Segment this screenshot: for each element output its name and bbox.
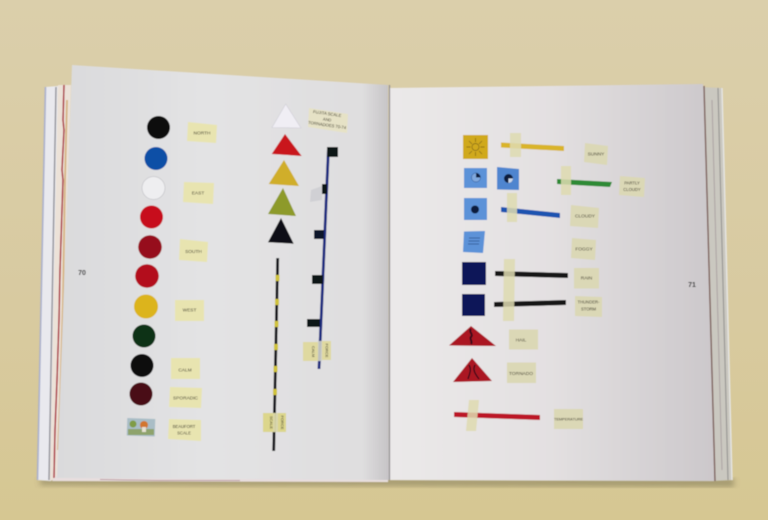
bar: cloudy (501, 193, 560, 222)
label: foggy (571, 238, 596, 260)
triangle: yellow (269, 160, 299, 186)
circle: crimson (135, 264, 159, 288)
left page sheet (57, 65, 389, 480)
right page stack (700, 86, 732, 481)
weather symbol: cloudy (464, 198, 487, 220)
triangle: black (268, 218, 294, 244)
bar: partly cloudy (557, 166, 612, 195)
label: calm: CALM (178, 368, 192, 374)
yellow ticks (273, 275, 280, 395)
label: tornado: TORNADO (509, 371, 533, 377)
label: Beaufort scale: BEAUFORT (173, 424, 196, 429)
circle: east (142, 176, 165, 200)
page number 71: 71 (688, 282, 696, 289)
bar: sunny (501, 133, 564, 157)
label: Fujita scale and tornadoes: TORNADOES 70-74 (308, 120, 347, 130)
tape labels (263, 413, 286, 432)
label: sporadic: SPORADIC (173, 396, 199, 402)
book shadow (40, 478, 734, 487)
page number 70: 70 (78, 270, 86, 277)
circle: north (147, 116, 170, 139)
triangle: olive (268, 188, 296, 216)
tape labels (303, 341, 331, 361)
black Beaufort scale line (263, 258, 286, 451)
label: Beaufort scale (168, 419, 201, 441)
label: west (175, 300, 204, 321)
weather symbol: partly cloudy two (497, 167, 519, 190)
label: cloudy: CLOUDY (575, 214, 596, 220)
book gutter (388, 85, 390, 480)
label: sunny: SUNNY (588, 152, 605, 158)
circle: blue (144, 147, 168, 170)
label: hail: HAIL (516, 338, 527, 344)
bar: temperature (454, 400, 540, 431)
book (37, 65, 734, 487)
circle: sporadic (130, 382, 152, 406)
Fujita scale triangles (268, 104, 302, 244)
label: temperature: TEMPERATURE (554, 416, 583, 422)
label: hail (509, 330, 538, 350)
circle: calm (130, 354, 154, 377)
label: south: SOUTH (185, 249, 202, 255)
triangle: white (272, 104, 301, 128)
label: Fujita scale and tornadoes (308, 108, 348, 133)
label: partly cloudy (619, 176, 645, 197)
label: temperature (554, 409, 583, 429)
weather symbol: tornado (453, 358, 492, 382)
tape labels: SCALE (269, 416, 274, 429)
label: sporadic (169, 387, 202, 408)
label: calm (171, 358, 200, 379)
label: north: NORTH (194, 130, 211, 136)
label: sunny (584, 143, 608, 165)
label: west: WEST (183, 308, 196, 314)
label: Fujita scale and tornadoes: AND (323, 116, 332, 123)
label: partly cloudy: CLOUDY (623, 187, 641, 192)
label: south (179, 239, 208, 262)
label: north (187, 122, 217, 143)
label: thunderstorm: THUNDER- (578, 300, 600, 304)
weather symbol: foggy (463, 231, 485, 253)
label: east (183, 182, 214, 204)
flags (307, 147, 338, 327)
label: rain (574, 268, 599, 288)
label: thunderstorm (575, 296, 602, 317)
label: cloudy (570, 205, 599, 228)
weather symbol: sunny (463, 135, 488, 159)
tape labels: FORCE (280, 416, 285, 430)
blue flagged scale line (303, 147, 338, 369)
left page stack (37, 85, 388, 482)
Beaufort scale picture (127, 418, 155, 436)
wind direction circles (130, 116, 170, 406)
circle: red (140, 206, 163, 228)
label: thunderstorm: STORM (581, 306, 597, 312)
bars: rain and thunderstorm (494, 259, 568, 321)
label: rain: RAIN (581, 276, 593, 282)
tape labels: FORCE (324, 344, 330, 358)
circle: south (138, 235, 162, 259)
weather symbol: thunderstorm (462, 294, 485, 316)
circle: west (134, 294, 158, 318)
blue line (319, 147, 328, 369)
label: partly cloudy: PARTLY (624, 180, 640, 186)
weather symbol: hail (449, 326, 496, 346)
label: Fujita scale and tornadoes: FUJITA SCALE (313, 109, 342, 118)
weather symbol: partly cloudy one (464, 168, 487, 188)
label: tornado (507, 362, 536, 383)
weather symbol: rain (462, 262, 486, 285)
label: east: EAST (192, 190, 204, 196)
black line (274, 258, 278, 451)
circle: green (132, 324, 156, 348)
right page sheet (390, 84, 714, 481)
triangle: red (272, 134, 302, 156)
label: Beaufort scale: SCALE (177, 430, 191, 436)
tape labels: CALM (311, 346, 316, 357)
label: foggy: FOGGY (575, 246, 593, 252)
flag shadows (310, 186, 322, 202)
